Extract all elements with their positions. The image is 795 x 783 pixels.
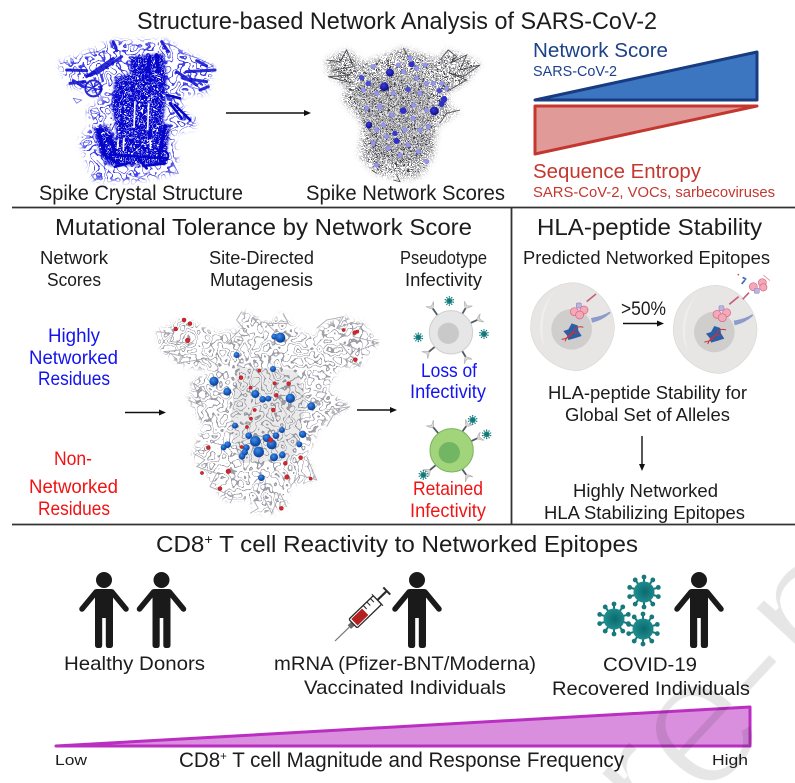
arrow: structure to infectivity	[357, 407, 397, 413]
title: Structure-based Network Analysis of SARS-CoV-2	[137, 8, 657, 35]
label: highly networked residues: Residues	[38, 368, 110, 390]
column label: site-directed mutagenesis: Mutagenesis	[210, 270, 313, 290]
network score heading: SARS-CoV-2	[533, 63, 617, 80]
arrow: structure to scores	[226, 110, 311, 116]
column label: network scores: Network	[40, 248, 109, 268]
heading: HLA-peptide stability: HLA-peptide Stability	[537, 214, 762, 240]
label: non-networked residues: Residues	[38, 498, 110, 520]
label: spike crystal structure: Spike Crystal Structure	[39, 181, 243, 205]
column label: network scores: Scores	[47, 270, 101, 290]
network score heading: Network Score	[533, 39, 668, 62]
label: highly networked HLA stabilizing epitopes: Highly Networked	[573, 480, 718, 501]
label: greater than 50 percent: >50%	[621, 299, 666, 320]
axis label: CD8 T cell magnitude and response frequency: +	[220, 749, 227, 763]
chart: network residue structure	[157, 310, 378, 513]
label: highly networked HLA stabilizing epitopes: HLA Stabilizing Epitopes	[544, 502, 745, 523]
watermark	[540, 540, 795, 783]
column label: network scores	[40, 248, 109, 290]
label: retained infectivity: Infectivity	[410, 500, 486, 522]
label: non-networked residues: Networked	[29, 476, 118, 498]
label: loss of infectivity: Loss of	[421, 360, 478, 382]
label: highly networked HLA stabilizing epitopes	[544, 480, 745, 523]
label: retained infectivity: Retained	[413, 478, 483, 500]
heading: CD8 T cell reactivity: +	[204, 531, 213, 547]
label: non-networked residues: Non-	[54, 448, 92, 470]
label: vaccinated individuals	[274, 653, 536, 699]
heading: CD8 T cell reactivity: CD8	[156, 531, 203, 557]
label: retained infectivity	[410, 478, 486, 522]
axis label: CD8 T cell magnitude and response frequency: T cell Magnitude and Response Frequency	[227, 748, 624, 772]
network score heading	[533, 39, 668, 80]
label: non-networked residues	[29, 448, 118, 520]
icon: healthy donors	[82, 572, 184, 648]
heading: mutational tolerance: Mutational Tolerance by Network Score	[55, 214, 472, 240]
sequence entropy heading: SARS-CoV-2, VOCs, sarbecoviruses	[533, 184, 775, 201]
wedge: network score	[535, 52, 757, 100]
label: recovered individuals: Recovered Individuals	[552, 678, 750, 700]
label: spike network scores: Spike Network Scores	[306, 181, 505, 205]
label: healthy donors: Healthy Donors	[64, 653, 205, 675]
label: HLA-peptide stability for global alleles: Global Set of Alleles	[565, 404, 730, 425]
axis label: high: High	[712, 752, 748, 769]
icon: pseudotype cell, retained infectivity	[419, 415, 491, 482]
arrow: residues to structure	[125, 410, 166, 416]
label: loss of infectivity	[410, 360, 486, 403]
heading: CD8 T cell reactivity: T cell Reactivity to Networked Epitopes	[213, 531, 638, 557]
label: vaccinated individuals: mRNA (Pfizer-BNT/Moderna)	[274, 653, 536, 675]
sequence entropy heading: Sequence Entropy	[533, 160, 702, 183]
label: highly networked residues: Highly	[48, 325, 100, 347]
label: loss of infectivity: Infectivity	[410, 381, 486, 403]
icon: spike network scores	[327, 48, 480, 182]
label: highly networked residues: Networked	[29, 347, 118, 369]
label: recovered individuals	[552, 654, 750, 700]
label: highly networked residues	[29, 325, 118, 390]
axis label: CD8 T cell magnitude and response frequency: CD8	[179, 748, 222, 772]
column label: pseudotype infectivity	[400, 248, 487, 290]
axis label: low: Low	[55, 752, 87, 769]
column label: site-directed mutagenesis	[209, 248, 314, 290]
icon: cell presenting stabilized HLA	[673, 274, 770, 373]
sequence entropy heading	[533, 160, 775, 201]
column label: pseudotype infectivity: Pseudotype	[400, 248, 487, 268]
icon: recovered individual	[677, 572, 721, 648]
icon: vaccinated individual	[395, 572, 439, 648]
column label: pseudotype infectivity: Infectivity	[405, 270, 482, 290]
label: recovered individuals: COVID-19	[603, 654, 697, 676]
label: vaccinated individuals: Vaccinated Individuals	[304, 677, 506, 699]
label: predicted networked epitopes: Predicted Networked Epitopes	[523, 247, 770, 268]
icon: coronavirus particles	[597, 575, 661, 646]
icon: cell presenting low HLA	[531, 283, 614, 371]
residues: non-networked (red)	[174, 318, 359, 510]
arrow: down to epitopes	[639, 436, 645, 471]
wedge: CD8 T cell magnitude	[56, 707, 750, 746]
icon: syringe	[329, 585, 392, 647]
column label: site-directed mutagenesis: Site-Directed	[209, 248, 314, 268]
label: HLA-peptide stability for global alleles: HLA-peptide Stability for	[548, 382, 747, 403]
icon: spike crystal structure	[58, 40, 215, 182]
arrow: cell to stabilized cell	[623, 320, 664, 326]
wedge: sequence entropy	[535, 106, 757, 154]
label: HLA-peptide stability for global alleles	[548, 382, 747, 425]
icon: pseudotype cell, loss of infectivity	[414, 296, 489, 364]
residues: highly networked (blue)	[209, 333, 315, 481]
